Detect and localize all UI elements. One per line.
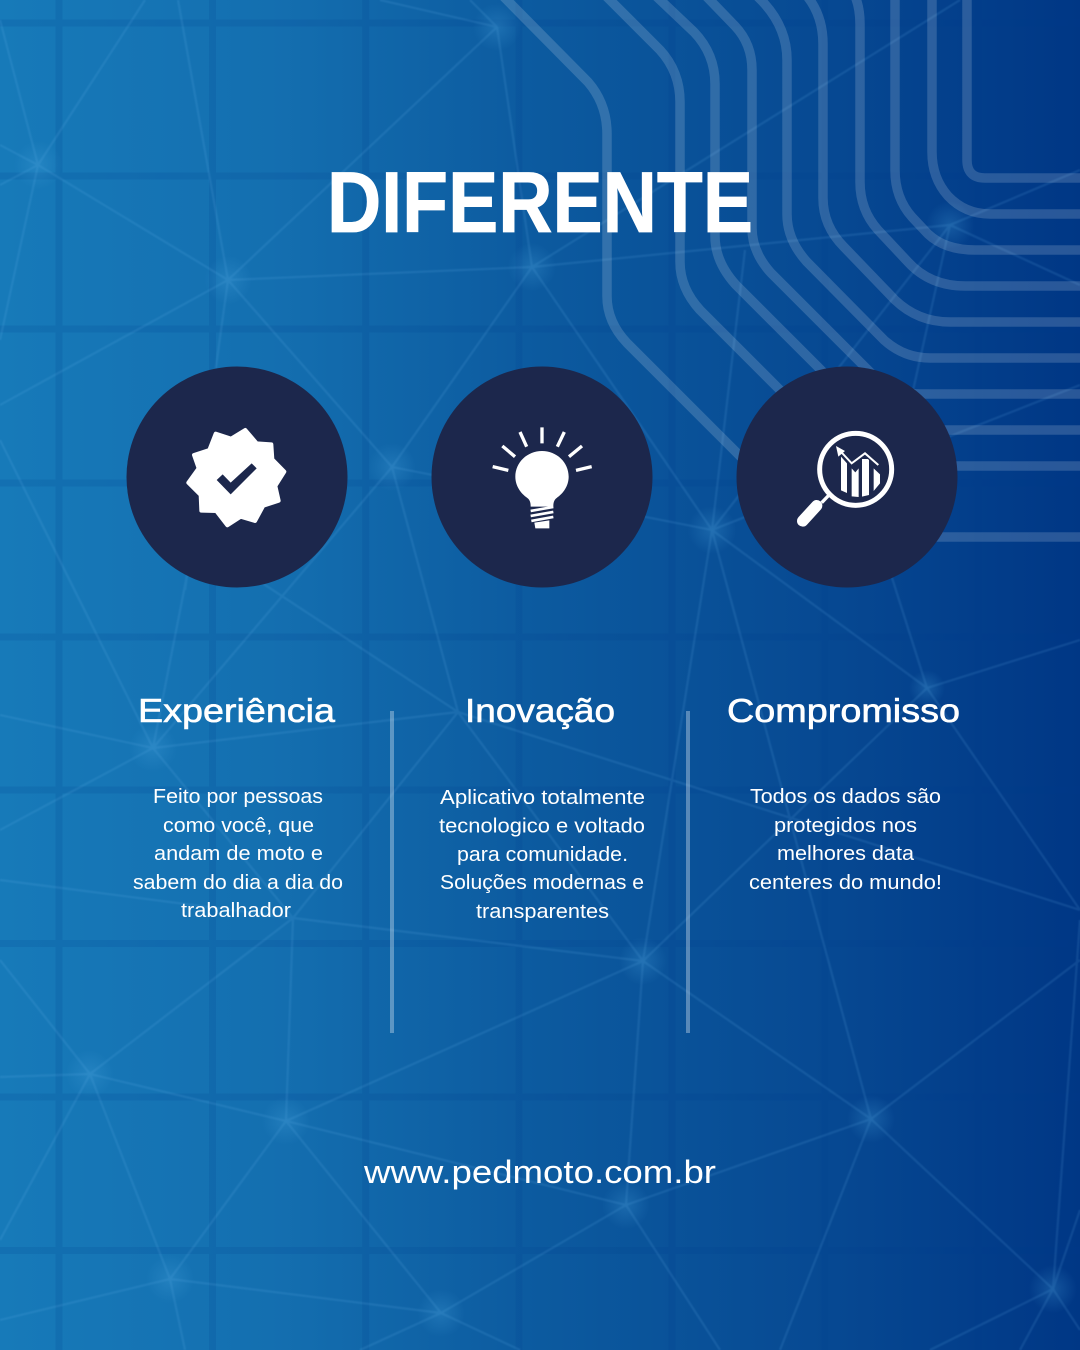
title: DIFERENTE	[327, 155, 753, 251]
text: Inovação description	[439, 787, 645, 923]
heading: Compromisso: Compromisso	[727, 693, 960, 730]
text: Inovação description: tecnologico e voltado	[439, 816, 645, 838]
text: Compromisso description: Todos os dados são	[750, 786, 941, 808]
text: Experiência description: andam de moto e	[154, 843, 323, 865]
text: Inovação description: Aplicativo totalmente	[440, 787, 645, 809]
text: Inovação description: para comunidade.	[457, 844, 628, 866]
divider right	[686, 711, 690, 1033]
text: Compromisso description	[749, 786, 942, 894]
text: Experiência description	[133, 786, 343, 922]
heading: Experiência: Experiência	[138, 693, 335, 730]
icon: magnifier with chart	[736, 366, 958, 588]
text: Compromisso description: centeres do mundo!	[749, 872, 942, 894]
text: Inovação description: transparentes	[476, 901, 609, 923]
text: Inovação description: Soluções modernas e	[440, 872, 644, 894]
divider left	[390, 711, 394, 1033]
text: Experiência description: sabem do dia a dia do	[133, 872, 343, 894]
text: Experiência description: como você, que	[163, 815, 314, 837]
text: Compromisso description: melhores data	[777, 843, 915, 865]
text: Experiência description: trabalhador	[181, 900, 291, 922]
circuit lines decoration	[503, 0, 1080, 537]
text: Experiência description: Feito por pessoas	[153, 786, 323, 808]
website url: www.pedmoto.com.br	[363, 1154, 716, 1190]
icon: light bulb	[432, 366, 652, 588]
icon: verified badge	[126, 366, 348, 588]
heading: Inovação: Inovação	[465, 693, 615, 730]
text: Compromisso description: protegidos nos	[774, 815, 917, 837]
